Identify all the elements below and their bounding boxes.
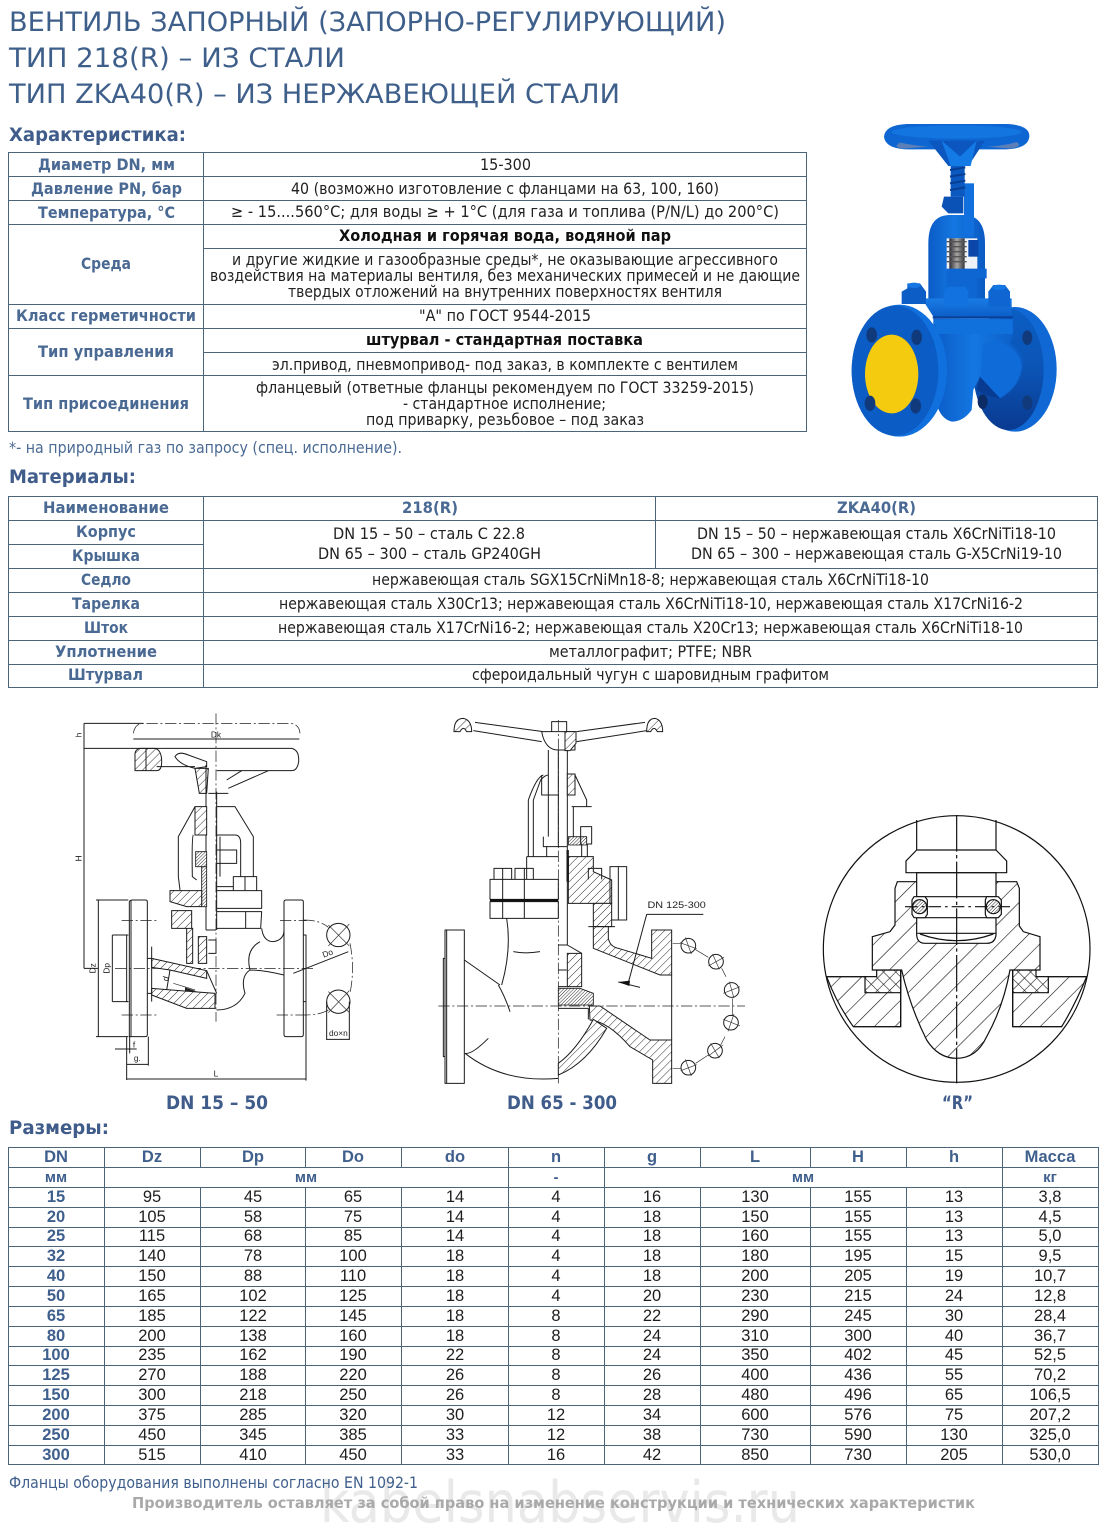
drawing: DN 65-300 section	[438, 718, 745, 1083]
row DN 100: 8	[551, 1346, 561, 1364]
table: characteristics: и другие жидкие и газообразные среды*, не оказывающие агрессивного	[232, 250, 778, 269]
row DN 80: 200	[138, 1327, 166, 1345]
table header row: DN	[44, 1148, 68, 1166]
table: materials: Уплотнение	[55, 642, 157, 661]
drawing: DN 15-50 section: L	[214, 1069, 219, 1079]
heading: characteristics: Характеристика:	[9, 125, 186, 146]
table: characteristics: фланцевый (ответные фланцы рекомендуем по ГОСТ 33259-2015)	[256, 378, 754, 397]
table: characteristics: твердых отложений на внутренних поверхностях вентиля	[288, 282, 722, 301]
table: characteristics: эл.привод, пневмопривод- под заказ, в комплекте с вентилем	[272, 355, 738, 374]
row DN 50: 12,8	[1034, 1287, 1066, 1305]
row DN 100: 24	[643, 1346, 661, 1364]
row DN 40: 150	[138, 1267, 166, 1285]
row DN 50: 18	[446, 1287, 464, 1305]
row DN 100: 100	[42, 1346, 70, 1364]
row DN 20: 150	[741, 1208, 769, 1226]
row DN 125: 400	[741, 1366, 769, 1384]
row DN 65: 245	[844, 1307, 872, 1325]
row DN 25: 68	[244, 1227, 262, 1245]
table header row: h	[949, 1148, 959, 1166]
row DN 32: 18	[643, 1247, 661, 1265]
table: characteristics: Тип управления	[38, 342, 174, 361]
row DN 200: 30	[446, 1406, 464, 1424]
row DN 15: 3,8	[1039, 1188, 1061, 1206]
table header row: L	[750, 1148, 760, 1166]
row DN 250: 730	[741, 1426, 769, 1444]
table: materials: нержавеющая сталь X30Cr13; нержавеющая сталь X6CrNiTi18-10, нержавеющая сталь X17CrNi16-2	[279, 594, 1023, 613]
row DN 300: 42	[643, 1446, 661, 1464]
table: characteristics: Температура, °С	[38, 203, 175, 222]
drawing: DN 15-50 section: Dz	[88, 963, 98, 973]
table: materials: 218(R)	[402, 498, 458, 517]
left flange	[852, 305, 947, 437]
row DN 150: 480	[741, 1386, 769, 1404]
row DN 80: 36,7	[1034, 1327, 1066, 1345]
indicator bar	[964, 183, 974, 237]
row DN 20: 18	[643, 1208, 661, 1226]
row DN 25: 4	[551, 1227, 561, 1245]
bolts	[902, 283, 1010, 307]
row DN 300: 850	[741, 1446, 769, 1464]
row DN 25: 14	[446, 1227, 464, 1245]
footnote: natural gas: *- на природный газ по запросу (спец. исполнение).	[9, 438, 402, 457]
row DN 80: 24	[643, 1327, 661, 1345]
row DN 65: 122	[239, 1307, 267, 1325]
row DN 50: 230	[741, 1287, 769, 1305]
table: characteristics: 40 (возможно изготовление с фланцами на 63, 100, 160)	[291, 179, 719, 198]
row DN 125: 26	[446, 1366, 464, 1384]
row DN 40: 4	[551, 1267, 561, 1285]
row DN 200: 34	[643, 1406, 661, 1424]
row DN 65: 290	[741, 1307, 769, 1325]
table header row: do	[445, 1148, 465, 1166]
table: characteristics: Диаметр DN, мм	[38, 155, 175, 174]
heading: materials: Материалы:	[9, 467, 136, 488]
drawing: DN 15-50 section: Do	[321, 947, 335, 960]
row DN 100: 402	[844, 1346, 872, 1364]
row DN 50: 215	[844, 1287, 872, 1305]
row DN 50: 102	[239, 1287, 267, 1305]
table header row: H	[852, 1148, 864, 1166]
row DN 15: 14	[446, 1188, 464, 1206]
table: materials: Штурвал	[68, 665, 143, 684]
row DN 40: 19	[945, 1267, 963, 1285]
row DN 200: 75	[945, 1406, 963, 1424]
row DN 150: 106,5	[1029, 1386, 1071, 1404]
table: characteristics	[8, 152, 807, 432]
row DN 20: 20	[47, 1208, 65, 1226]
row DN 200: 285	[239, 1406, 267, 1424]
table: dimensions	[8, 1147, 1099, 1465]
row DN 32: 4	[551, 1247, 561, 1265]
row DN 125: 55	[945, 1366, 963, 1384]
row DN 25: 18	[643, 1227, 661, 1245]
table: materials	[8, 496, 1098, 688]
table: characteristics: 15-300	[480, 155, 531, 174]
row DN 125: 436	[844, 1366, 872, 1384]
table: materials: сфероидальный чугун с шаровидным графитом	[472, 665, 829, 684]
table: characteristics: Среда	[81, 254, 131, 273]
row DN 100: 235	[138, 1346, 166, 1364]
row DN 125: 188	[239, 1366, 267, 1384]
table header row: Dz	[142, 1148, 162, 1166]
row DN 125: 125	[42, 1366, 70, 1384]
row DN 150: 26	[446, 1386, 464, 1404]
row DN 250: 590	[844, 1426, 872, 1444]
row DN 15: 95	[143, 1188, 161, 1206]
row DN 50: 4	[551, 1287, 561, 1305]
right flange	[973, 307, 1057, 432]
row DN 200: 375	[138, 1406, 166, 1424]
table units row: мм	[792, 1169, 814, 1186]
row DN 40: 200	[741, 1267, 769, 1285]
row DN 25: 115	[139, 1227, 165, 1245]
row DN 65: 18	[446, 1307, 464, 1325]
table: characteristics: под приварку, резьбовое – под заказ	[366, 410, 644, 429]
title: ТИП 218(R) – ИЗ СТАЛИ	[8, 43, 345, 74]
table: characteristics: Тип присоединения	[23, 394, 189, 413]
table: characteristics: - стандартное исполнение;	[403, 394, 606, 413]
row DN 32: 9,5	[1039, 1247, 1061, 1265]
row DN 20: 4	[551, 1208, 561, 1226]
row DN 15: 16	[643, 1188, 661, 1206]
row DN 80: 80	[47, 1327, 65, 1345]
row DN 50: 20	[643, 1287, 661, 1305]
row DN 250: 12	[547, 1426, 565, 1444]
row DN 150: 28	[643, 1386, 661, 1404]
table units row: мм	[45, 1169, 67, 1186]
row DN 15: 130	[741, 1188, 769, 1206]
table units row: мм	[295, 1169, 317, 1186]
table header row: Dp	[242, 1148, 264, 1166]
table header row: Масса	[1025, 1148, 1076, 1166]
row DN 300: 515	[138, 1446, 166, 1464]
row DN 300: 33	[446, 1446, 464, 1464]
row DN 20: 105	[138, 1208, 166, 1226]
row DN 300: 16	[547, 1446, 565, 1464]
row DN 250: 325,0	[1029, 1426, 1071, 1444]
table: characteristics: ≥ - 15....560°С; для воды ≥ + 1°С (для газа и топлива (P/N/L) до 200°С)	[231, 202, 779, 221]
table: materials: нержавеющая сталь X17CrNi16-2; нержавеющая сталь X20Cr13; нержавеющая сталь X6CrNiTi18-10	[278, 618, 1023, 637]
row DN 25: 155	[844, 1227, 872, 1245]
table header row: g	[647, 1148, 657, 1166]
drawing: DN 15-50 section: H	[74, 855, 84, 861]
table units row: кг	[1043, 1169, 1057, 1186]
row DN 250: 385	[339, 1426, 367, 1444]
table: materials: Шток	[84, 618, 128, 637]
row DN 300: 450	[339, 1446, 367, 1464]
row DN 20: 4,5	[1039, 1208, 1061, 1226]
row DN 200: 600	[741, 1406, 769, 1424]
row DN 32: 195	[844, 1247, 872, 1265]
row DN 40: 205	[844, 1267, 872, 1285]
row DN 25: 5,0	[1039, 1227, 1061, 1245]
row DN 100: 52,5	[1034, 1346, 1066, 1364]
table: materials: Крышка	[72, 546, 140, 565]
row DN 25: 25	[47, 1227, 65, 1245]
row DN 32: 140	[138, 1247, 166, 1265]
row DN 80: 8	[551, 1327, 561, 1345]
stem thread	[947, 238, 967, 275]
row DN 80: 138	[239, 1327, 267, 1345]
drawing: DN 15-50 section: h	[74, 732, 84, 737]
row DN 80: 310	[741, 1327, 769, 1345]
caption: R: “R”	[942, 1093, 973, 1114]
row DN 250: 130	[940, 1426, 968, 1444]
table: characteristics: Давление PN, бар	[31, 179, 182, 198]
row DN 25: 85	[344, 1227, 362, 1245]
bonnet flange	[922, 298, 1012, 317]
row DN 150: 250	[339, 1386, 367, 1404]
row DN 25: 160	[741, 1227, 769, 1245]
row DN 50: 24	[945, 1287, 963, 1305]
row DN 65: 28,4	[1034, 1307, 1066, 1325]
drawing: DN 15-50 section: do×n	[329, 1028, 348, 1038]
row DN 65: 65	[47, 1307, 65, 1325]
handwheel	[884, 124, 1029, 149]
row DN 40: 88	[244, 1267, 262, 1285]
row DN 150: 8	[551, 1386, 561, 1404]
row DN 32: 18	[446, 1247, 464, 1265]
row DN 250: 33	[446, 1426, 464, 1444]
row DN 40: 40	[47, 1267, 65, 1285]
row DN 50: 125	[339, 1287, 367, 1305]
row DN 65: 8	[551, 1307, 561, 1325]
row DN 300: 730	[844, 1446, 872, 1464]
row DN 300: 205	[940, 1446, 968, 1464]
row DN 40: 10,7	[1034, 1267, 1066, 1285]
table: characteristics: Холодная и горячая вода, водяной пар	[339, 226, 671, 245]
row DN 32: 100	[339, 1247, 367, 1265]
row DN 32: 32	[47, 1247, 65, 1265]
row DN 150: 496	[844, 1386, 872, 1404]
row DN 20: 58	[244, 1208, 262, 1226]
table: characteristics: Класс герметичности	[16, 306, 196, 325]
caption: DN 15-50: DN 15 – 50	[166, 1093, 268, 1114]
row DN 65: 22	[643, 1307, 661, 1325]
row DN 150: 150	[42, 1386, 70, 1404]
row DN 40: 18	[643, 1267, 661, 1285]
row DN 32: 180	[741, 1247, 769, 1265]
drawing: DN 15-50 section	[74, 713, 352, 1081]
row DN 15: 155	[844, 1188, 872, 1206]
drawing: detail R	[823, 815, 1090, 1083]
note: manufacturer disclaimer: Производитель оставляет за собой право на изменение конструкции и технических характеристик	[132, 1494, 975, 1512]
row DN 20: 14	[446, 1208, 464, 1226]
row DN 20: 13	[945, 1208, 963, 1226]
row DN 300: 530,0	[1029, 1446, 1071, 1464]
row DN 15: 45	[244, 1188, 262, 1206]
table: materials: DN 15 – 50 – сталь С 22.8	[333, 524, 525, 543]
row DN 15: 13	[945, 1188, 963, 1206]
drawing: DN 15-50 section: g.	[134, 1053, 141, 1063]
row DN 25: 13	[945, 1227, 963, 1245]
row DN 150: 65	[945, 1386, 963, 1404]
row DN 250: 450	[138, 1426, 166, 1444]
title: ВЕНТИЛЬ ЗАПОРНЫЙ (ЗАПОРНО-РЕГУЛИРУЮЩИЙ)	[9, 6, 726, 38]
table: characteristics: штурвал - стандартная поставка	[366, 330, 643, 349]
row DN 40: 110	[340, 1267, 366, 1285]
drawing: DN 15-50 section: f	[133, 1039, 136, 1049]
table units row: -	[554, 1169, 558, 1186]
title	[8, 6, 726, 110]
heading: dimensions: Размеры:	[9, 1118, 109, 1139]
row DN 65: 30	[945, 1307, 963, 1325]
row DN 150: 218	[239, 1386, 267, 1404]
row DN 125: 26	[643, 1366, 661, 1384]
row DN 80: 160	[339, 1327, 367, 1345]
row DN 250: 38	[643, 1426, 661, 1444]
dimension lines	[84, 723, 299, 1037]
table: materials: нержавеющая сталь SGX15CrNiMn18-8; нержавеющая сталь X6CrNiTi18-10	[372, 570, 929, 589]
row DN 65: 145	[339, 1307, 367, 1325]
table: materials: DN 65 – 300 – сталь GP240GH	[318, 544, 541, 563]
row DN 150: 300	[138, 1386, 166, 1404]
row DN 125: 220	[339, 1366, 367, 1384]
row DN 80: 40	[945, 1327, 963, 1345]
row DN 80: 18	[446, 1327, 464, 1345]
note: flanges standard: Фланцы оборудования выполнены согласно EN 1092-1	[9, 1473, 418, 1492]
row DN 15: 4	[551, 1188, 561, 1206]
row DN 100: 45	[945, 1346, 963, 1364]
table: materials: металлографит; PTFE; NBR	[549, 642, 752, 661]
row DN 32: 78	[244, 1247, 262, 1265]
row DN 15: 15	[47, 1188, 65, 1206]
row DN 32: 15	[945, 1247, 963, 1265]
row DN 50: 50	[47, 1287, 65, 1305]
row DN 300: 300	[42, 1446, 70, 1464]
table: materials: DN 65 – 300 – нержавеющая сталь G-X5CrNi19-10	[691, 544, 1062, 563]
row DN 100: 350	[741, 1346, 769, 1364]
row DN 250: 250	[42, 1426, 70, 1444]
drawing: DN 15-50 section: Dk	[211, 729, 222, 739]
table: characteristics: воздействия на материалы вентиля, без механических примесей и не дающие	[210, 266, 800, 285]
row DN 20: 155	[844, 1208, 872, 1226]
row DN 15: 65	[344, 1188, 362, 1206]
title: ТИП ZKA40(R) – ИЗ НЕРЖАВЕЮЩЕЙ СТАЛИ	[8, 78, 620, 110]
row DN 200: 320	[339, 1406, 367, 1424]
row DN 125: 70,2	[1034, 1366, 1066, 1384]
row DN 40: 18	[446, 1267, 464, 1285]
table: materials: Тарелка	[72, 594, 140, 613]
row DN 125: 8	[551, 1366, 561, 1384]
upper stem	[951, 165, 965, 197]
row DN 200: 207,2	[1029, 1406, 1071, 1424]
row DN 200: 200	[42, 1406, 70, 1424]
row DN 50: 165	[138, 1287, 166, 1305]
drawing: DN 15-50 section: d	[160, 975, 171, 982]
row DN 200: 576	[844, 1406, 872, 1424]
yoke	[928, 215, 985, 302]
drawing: DN 15-50 section: Dp	[102, 963, 112, 974]
row DN 20: 75	[344, 1208, 362, 1226]
table: materials: Наименование	[43, 498, 169, 517]
row DN 80: 300	[844, 1327, 872, 1345]
row DN 125: 270	[138, 1366, 166, 1384]
row DN 250: 345	[239, 1426, 267, 1444]
photo: blue valve	[852, 124, 1057, 437]
table: materials: Седло	[81, 570, 131, 589]
table: materials: DN 15 – 50 – нержавеющая сталь X6CrNiTi18-10	[697, 524, 1056, 543]
row DN 65: 185	[138, 1307, 166, 1325]
row DN 100: 162	[239, 1346, 267, 1364]
table: materials: Корпус	[76, 522, 136, 541]
table: characteristics: "А" по ГОСТ 9544-2015	[419, 306, 591, 325]
table header row: Do	[342, 1148, 364, 1166]
table: materials: ZKA40(R)	[837, 498, 916, 517]
table header row: n	[551, 1148, 561, 1166]
row DN 300: 410	[239, 1446, 267, 1464]
row DN 200: 12	[547, 1406, 565, 1424]
row DN 100: 22	[446, 1346, 464, 1364]
caption: DN 65-300: DN 65 - 300	[507, 1093, 617, 1114]
drawing: DN 65-300 section: DN 125-300	[647, 900, 706, 910]
body	[933, 318, 1023, 422]
row DN 100: 190	[339, 1346, 367, 1364]
